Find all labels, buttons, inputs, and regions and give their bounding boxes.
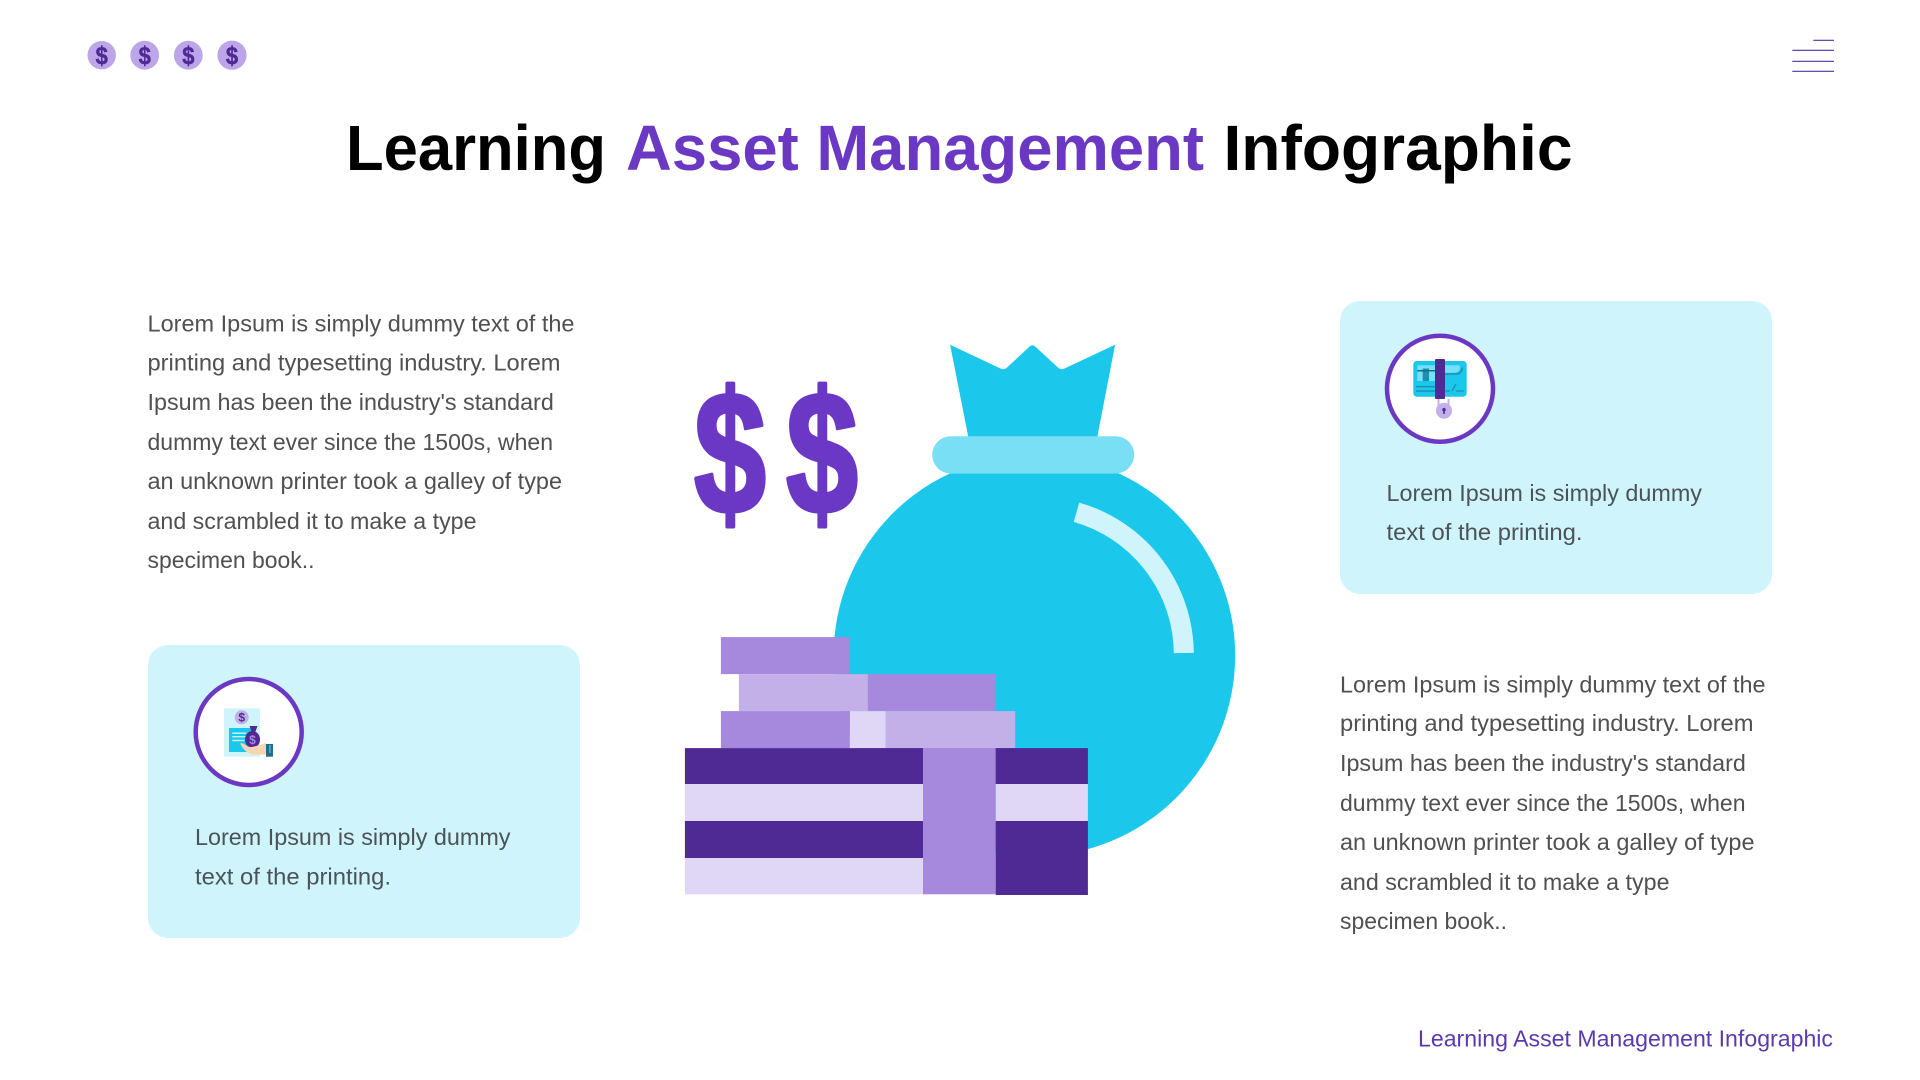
card text: text of the printing. bbox=[1386, 519, 1582, 545]
icon row: dollar coins: $ bbox=[182, 42, 194, 70]
card text: Lorem Ipsum is simply dummy bbox=[195, 824, 511, 850]
text block: left paragraph: Ipsum has been the industry's standard bbox=[148, 389, 554, 415]
text block: right paragraph: dummy text ever since the 1500s, when bbox=[1340, 790, 1746, 816]
icon: money bag in hand over document: $ bbox=[238, 710, 245, 724]
icon row: dollar coins: $ bbox=[226, 42, 238, 70]
text block: right paragraph: Ipsum has been the industry's standard bbox=[1340, 750, 1746, 776]
icon: money bag in hand over document bbox=[196, 679, 302, 785]
icon: menu lines bbox=[1792, 40, 1834, 71]
panel: left card bbox=[148, 645, 580, 938]
text block: right paragraph: printing and typesetting industry. Lorem bbox=[1340, 710, 1754, 736]
cash stacks bbox=[685, 637, 1088, 895]
card text: Lorem Ipsum is simply dummy bbox=[1386, 480, 1702, 506]
illustration: money bag with dollars and cash stacks bbox=[685, 345, 1235, 895]
title: Infographic bbox=[1224, 112, 1572, 184]
text block: right paragraph bbox=[1340, 671, 1766, 934]
footer label: Learning Asset Management Infographic bbox=[1418, 1026, 1833, 1052]
icon row: dollar coins: $ bbox=[96, 42, 108, 70]
text block: left paragraph: and scrambled it to make a type bbox=[148, 508, 476, 534]
money bag bbox=[834, 345, 1235, 856]
dollar signs: $ bbox=[694, 356, 766, 552]
title bbox=[346, 112, 1572, 184]
title: Learning bbox=[346, 112, 606, 184]
title: Asset Management bbox=[626, 112, 1204, 184]
text block: left paragraph bbox=[148, 311, 574, 573]
card text bbox=[195, 824, 511, 889]
text block: left paragraph: Lorem Ipsum is simply dummy text of the bbox=[148, 311, 574, 337]
panel: right card bbox=[1340, 301, 1772, 594]
dollar signs: $ bbox=[786, 356, 858, 552]
card text bbox=[1386, 480, 1702, 545]
text block: right paragraph: specimen book.. bbox=[1340, 908, 1507, 934]
text block: left paragraph: an unknown printer took a galley of type bbox=[148, 468, 562, 494]
text block: left paragraph: specimen book.. bbox=[148, 547, 314, 573]
text block: right paragraph: and scrambled it to make a type bbox=[1340, 869, 1670, 895]
text block: left paragraph: printing and typesetting industry. Lorem bbox=[148, 349, 560, 375]
text block: right paragraph: Lorem Ipsum is simply dummy text of the bbox=[1340, 671, 1766, 697]
text block: left paragraph: dummy text ever since the 1500s, when bbox=[148, 429, 553, 455]
icon: locked credit card bbox=[1387, 336, 1493, 442]
card text: text of the printing. bbox=[195, 863, 391, 889]
dollar signs bbox=[694, 356, 858, 552]
icon row: dollar coins bbox=[88, 41, 247, 70]
icon: money bag in hand over document: $ bbox=[249, 733, 256, 747]
icon row: dollar coins: $ bbox=[139, 42, 151, 70]
text block: right paragraph: an unknown printer took a galley of type bbox=[1340, 829, 1754, 855]
